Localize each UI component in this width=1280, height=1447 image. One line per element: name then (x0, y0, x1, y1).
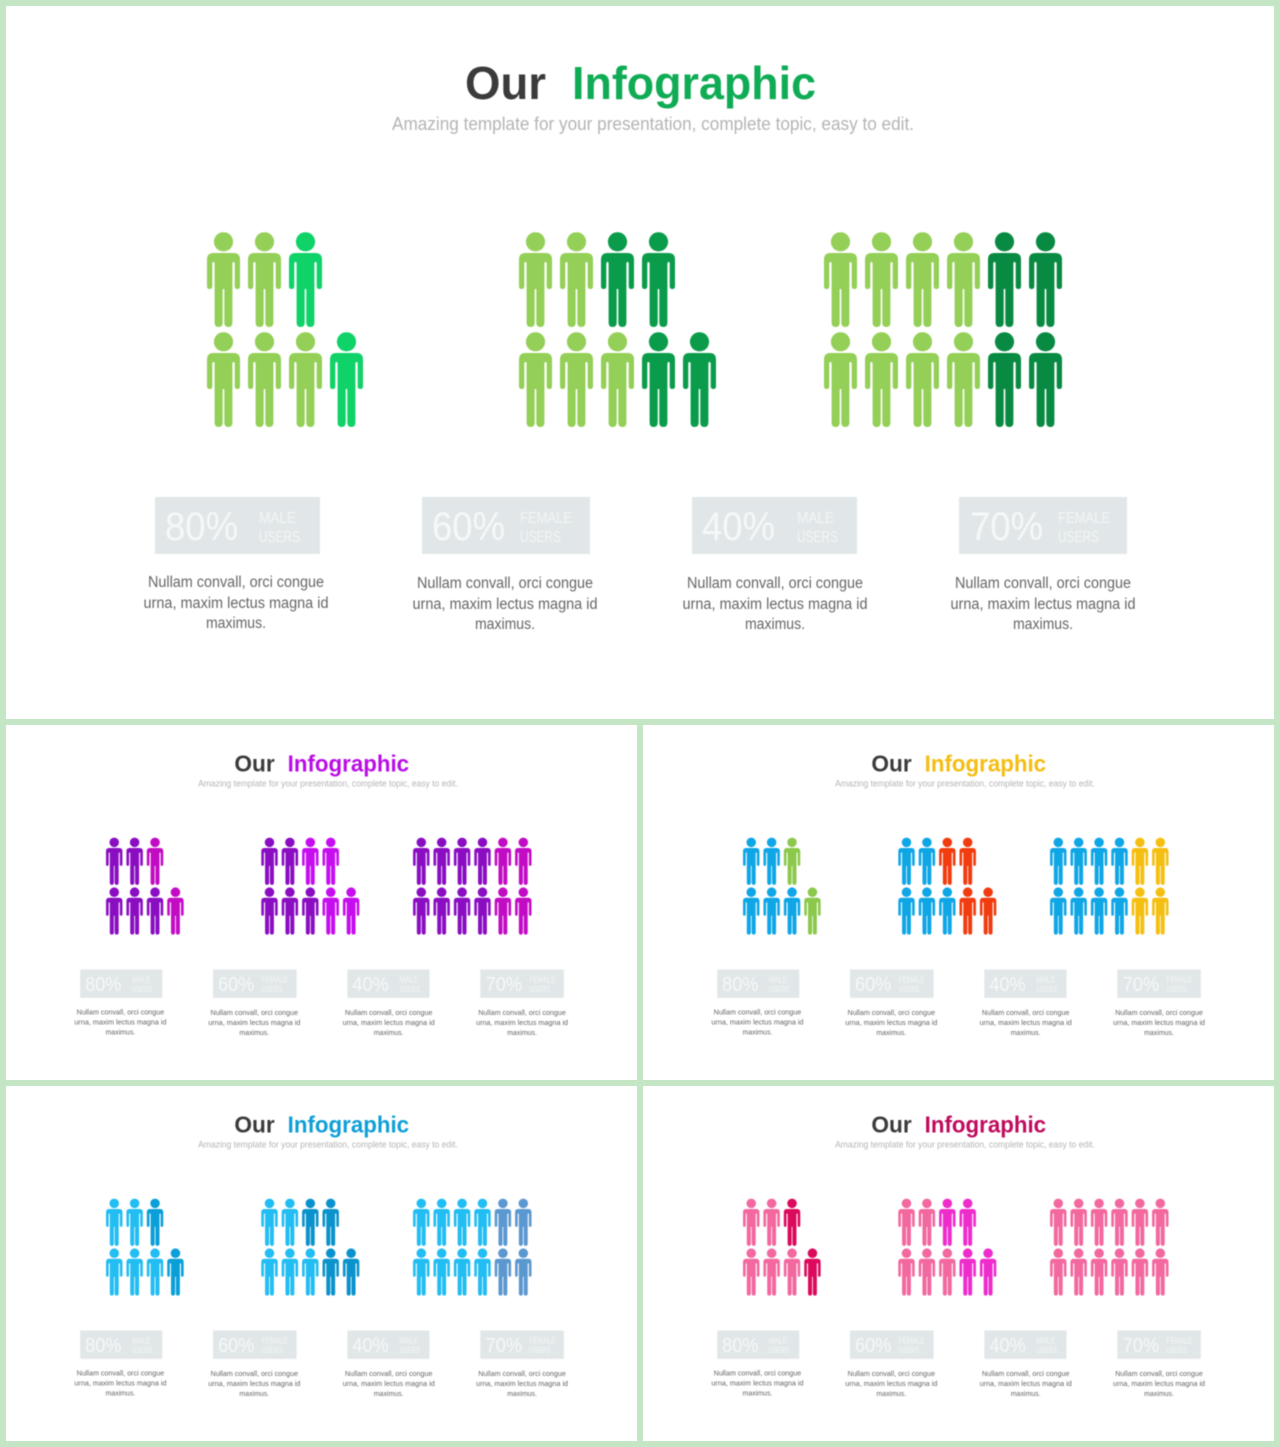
stat: 80% male users (717, 1330, 799, 1359)
stat: 80% male users: MALE (769, 1336, 787, 1345)
chart: people group 2 (898, 838, 996, 935)
text block 2: Nullam convall, orci congue (417, 575, 593, 592)
stat: 60% female users: USERS (262, 985, 282, 994)
text block 2: Nullam convall, orci congue (848, 1369, 935, 1378)
stat: 60% female users: FEMALE (899, 1336, 925, 1345)
text block 3: urna, maxim lectus magna id (980, 1379, 1072, 1388)
chart: people group 1 (207, 232, 363, 427)
text block 2 (845, 1369, 937, 1398)
stat: 70% female users: 70% (970, 505, 1043, 549)
text block 2: maximus. (475, 616, 535, 633)
title: Our (234, 750, 275, 776)
stat: 70% female users (959, 497, 1127, 554)
stat: 60% female users: 60% (218, 1335, 254, 1357)
text block 4: Nullam convall, orci congue (955, 575, 1131, 592)
title: Our (871, 1111, 912, 1137)
subtitle: Amazing template for your presentation, complete topic, easy to edit. (835, 1140, 1095, 1150)
text block 1 (74, 1368, 166, 1398)
stat: 80% male users (717, 969, 799, 998)
text block 1: urna, maxim lectus magna id (74, 1018, 166, 1027)
text block 1: Nullam convall, orci congue (714, 1368, 801, 1377)
title: Infographic (925, 750, 1046, 776)
stat: 60% female users: 60% (432, 505, 505, 549)
stat: 80% male users: 80% (165, 505, 238, 549)
title: Infographic (288, 1111, 409, 1137)
stat: 40% male users: MALE (797, 510, 834, 527)
stat: 80% male users: USERS (769, 1346, 789, 1355)
stat: 40% male users: USERS (1037, 985, 1057, 994)
text block 2 (208, 1369, 300, 1398)
stat: 70% female users (480, 1330, 564, 1359)
chart: people group 3 (413, 1199, 532, 1296)
text block 4 (1113, 1369, 1205, 1398)
stat: 70% female users: USERS (1167, 1346, 1187, 1355)
stat: 60% female users: FEMALE (899, 975, 925, 984)
text block 2 (845, 1008, 937, 1037)
panel: blue slide (6, 1086, 637, 1441)
stat: 70% female users (1117, 1330, 1201, 1359)
text block 1: urna, maxim lectus magna id (711, 1018, 803, 1027)
text block 4: maximus. (507, 1389, 537, 1398)
stat: 60% female users: FEMALE (520, 510, 572, 527)
text block 3 (980, 1369, 1072, 1398)
text block 1 (74, 1007, 166, 1037)
stat: 60% female users (213, 969, 297, 998)
chart: people group 1 (106, 1199, 184, 1296)
subtitle: Amazing template for your presentation, complete topic, easy to edit. (392, 114, 914, 134)
stat: 40% male users: USERS (797, 529, 838, 546)
stat: 70% female users: FEMALE (530, 1336, 555, 1345)
text block 3: maximus. (1011, 1389, 1041, 1398)
stat: 60% female users: FEMALE (262, 975, 288, 984)
stat: 40% male users (984, 969, 1066, 998)
text block 3: Nullam convall, orci congue (687, 575, 863, 592)
stat: 70% female users: FEMALE (1058, 510, 1110, 527)
text block 4: Nullam convall, orci congue (478, 1369, 566, 1378)
title: Our (234, 1111, 275, 1137)
panel: pink slide (643, 1086, 1274, 1441)
stat: 40% male users: USERS (400, 1346, 420, 1355)
stat: 80% male users: USERS (769, 985, 789, 994)
text block 2: maximus. (239, 1389, 269, 1398)
stat: 70% female users: 70% (1123, 1335, 1159, 1357)
chart: people group 3 (413, 838, 532, 935)
chart: people group 2 (261, 838, 359, 935)
title: Our (871, 750, 912, 776)
stat: 40% male users: MALE (400, 1336, 418, 1345)
stat: 70% female users: 70% (486, 974, 522, 996)
text block 4: urna, maxim lectus magna id (476, 1018, 568, 1027)
text block 2: Nullam convall, orci congue (211, 1008, 298, 1017)
text block 2: urna, maxim lectus magna id (208, 1379, 300, 1388)
text block 1 (711, 1368, 803, 1398)
stat: 70% female users (480, 969, 564, 998)
text block 4: maximus. (1144, 1028, 1174, 1037)
stat: 60% female users: 60% (855, 1335, 891, 1357)
text block 1: Nullam convall, orci congue (714, 1007, 801, 1016)
stat: 80% male users (80, 1330, 162, 1359)
text block 1 (144, 574, 328, 632)
text block 4: urna, maxim lectus magna id (1113, 1379, 1205, 1388)
text block 3 (343, 1008, 435, 1037)
stat: 70% female users: 70% (486, 1335, 522, 1357)
stat: 80% male users: MALE (769, 975, 787, 984)
stat: 70% female users: USERS (1167, 985, 1187, 994)
text block 4 (476, 1008, 568, 1037)
text block 2: maximus. (876, 1028, 906, 1037)
stat: 80% male users: 80% (85, 1335, 121, 1357)
chart: people group 3 (824, 232, 1062, 427)
text block 2 (412, 575, 598, 633)
text block 4: maximus. (1144, 1389, 1174, 1398)
text block 2: maximus. (876, 1389, 906, 1398)
text block 4: urna, maxim lectus magna id (1113, 1018, 1205, 1027)
text block 1: urna, maxim lectus magna id (144, 595, 328, 612)
subtitle: Amazing template for your presentation, complete topic, easy to edit. (198, 779, 458, 789)
text block 3: urna, maxim lectus magna id (980, 1018, 1072, 1027)
stat: 40% male users: 40% (702, 505, 775, 549)
stat: 40% male users: USERS (1037, 1346, 1057, 1355)
title: Infographic (288, 750, 409, 776)
text block 3: maximus. (374, 1389, 404, 1398)
chart: people group 1 (743, 1199, 821, 1296)
stat: 80% male users: 80% (722, 1335, 758, 1357)
stat: 60% female users: USERS (520, 529, 561, 546)
stat: 70% female users: 70% (1123, 974, 1159, 996)
stat: 80% male users: MALE (259, 510, 296, 527)
text block 1 (711, 1007, 803, 1037)
chart: people group 2 (898, 1199, 996, 1296)
stat: 80% male users: USERS (259, 529, 300, 546)
title: Infographic (572, 57, 816, 109)
stat: 40% male users: MALE (1037, 975, 1055, 984)
text block 3 (343, 1369, 435, 1398)
stat: 40% male users: 40% (989, 1335, 1026, 1357)
stat: 80% male users: 80% (722, 974, 758, 996)
stat: 40% male users: 40% (352, 974, 389, 996)
stat: 60% female users: FEMALE (262, 1336, 288, 1345)
stat: 40% male users (347, 1330, 429, 1359)
stat: 70% female users: USERS (530, 1346, 550, 1355)
chart: people group 2 (519, 232, 716, 427)
text block 3: Nullam convall, orci congue (982, 1008, 1069, 1017)
stat: 60% female users: 60% (855, 974, 891, 996)
chart: people group 3 (1050, 838, 1169, 935)
stat: 70% female users (1117, 969, 1201, 998)
subtitle: Amazing template for your presentation, complete topic, easy to edit. (198, 1140, 458, 1150)
stat: 60% female users: 60% (218, 974, 254, 996)
stat: 80% male users: MALE (132, 975, 150, 984)
text block 1: Nullam convall, orci congue (77, 1368, 164, 1377)
title (465, 57, 816, 109)
text block 4: Nullam convall, orci congue (1115, 1008, 1203, 1017)
panel: green main slide (6, 6, 1274, 719)
text block 3: maximus. (1011, 1028, 1041, 1037)
text block 4 (476, 1369, 568, 1398)
stat: 70% female users: USERS (530, 985, 550, 994)
text block 1: urna, maxim lectus magna id (74, 1379, 166, 1388)
stat: 80% male users (155, 497, 320, 554)
text block 3: maximus. (745, 616, 805, 633)
text block 4: maximus. (507, 1028, 537, 1037)
stat: 60% female users: USERS (262, 1346, 282, 1355)
text block 2: Nullam convall, orci congue (848, 1008, 935, 1017)
text block 4: Nullam convall, orci congue (478, 1008, 566, 1017)
stat: 70% female users: FEMALE (530, 975, 555, 984)
text block 4 (950, 575, 1136, 633)
text block 4: maximus. (1013, 616, 1073, 633)
stat: 60% female users (213, 1330, 297, 1359)
text block 2: urna, maxim lectus magna id (845, 1018, 937, 1027)
text block 3: Nullam convall, orci congue (345, 1008, 432, 1017)
text block 2: urna, maxim lectus magna id (845, 1379, 937, 1388)
text block 1: maximus. (743, 1389, 772, 1398)
text block 3: urna, maxim lectus magna id (682, 596, 868, 613)
stat: 60% female users (422, 497, 590, 554)
panel: multicolour yellow slide (643, 725, 1274, 1080)
text block 3: urna, maxim lectus magna id (343, 1018, 435, 1027)
subtitle: Amazing template for your presentation, complete topic, easy to edit. (835, 779, 1095, 789)
chart: people group 3 (1050, 1199, 1169, 1296)
stat: 70% female users: USERS (1058, 529, 1099, 546)
title: Infographic (925, 1111, 1046, 1137)
chart: people group 1 (106, 838, 184, 935)
text block 4: urna, maxim lectus magna id (950, 596, 1136, 613)
stat: 40% male users: USERS (400, 985, 420, 994)
text block 1: urna, maxim lectus magna id (711, 1379, 803, 1388)
stat: 40% male users: 40% (989, 974, 1026, 996)
text block 2 (208, 1008, 300, 1037)
text block 3 (682, 575, 868, 633)
stat: 40% male users: MALE (400, 975, 418, 984)
stat: 60% female users (850, 1330, 934, 1359)
text block 1: maximus. (206, 615, 266, 632)
stat: 70% female users: FEMALE (1167, 1336, 1192, 1345)
text block 1: Nullam convall, orci congue (77, 1007, 164, 1016)
text block 1: maximus. (106, 1028, 135, 1037)
title (871, 1111, 1046, 1137)
text block 2: urna, maxim lectus magna id (412, 596, 598, 613)
text block 3: Nullam convall, orci congue (982, 1369, 1069, 1378)
text block 4: urna, maxim lectus magna id (476, 1379, 568, 1388)
title (871, 750, 1046, 776)
title (234, 750, 409, 776)
stat: 80% male users: USERS (132, 1346, 152, 1355)
text block 3: maximus. (374, 1028, 404, 1037)
text block 2: urna, maxim lectus magna id (208, 1018, 300, 1027)
stat: 40% male users: 40% (352, 1335, 389, 1357)
text block 4 (1113, 1008, 1205, 1037)
text block 3: urna, maxim lectus magna id (343, 1379, 435, 1388)
panel: purple slide (6, 725, 637, 1080)
chart: people group 1 (743, 838, 821, 935)
text block 1: maximus. (743, 1028, 772, 1037)
stat: 40% male users (692, 497, 857, 554)
text block 2: maximus. (239, 1028, 269, 1037)
stat: 40% male users: MALE (1037, 1336, 1055, 1345)
stat: 80% male users: USERS (132, 985, 152, 994)
stat: 70% female users: FEMALE (1167, 975, 1192, 984)
stat: 60% female users: USERS (899, 1346, 919, 1355)
stat: 40% male users (984, 1330, 1066, 1359)
text block 3: Nullam convall, orci congue (345, 1369, 432, 1378)
stat: 80% male users (80, 969, 162, 998)
chart: people group 2 (261, 1199, 359, 1296)
stat: 80% male users: MALE (132, 1336, 150, 1345)
text block 4: Nullam convall, orci congue (1115, 1369, 1203, 1378)
title: Our (465, 57, 546, 109)
stat: 40% male users (347, 969, 429, 998)
stat: 60% female users: USERS (899, 985, 919, 994)
stat: 60% female users (850, 969, 934, 998)
text block 1: maximus. (106, 1389, 135, 1398)
title (234, 1111, 409, 1137)
text block 3 (980, 1008, 1072, 1037)
stat: 80% male users: 80% (85, 974, 121, 996)
text block 2: Nullam convall, orci congue (211, 1369, 298, 1378)
text block 1: Nullam convall, orci congue (148, 574, 324, 591)
